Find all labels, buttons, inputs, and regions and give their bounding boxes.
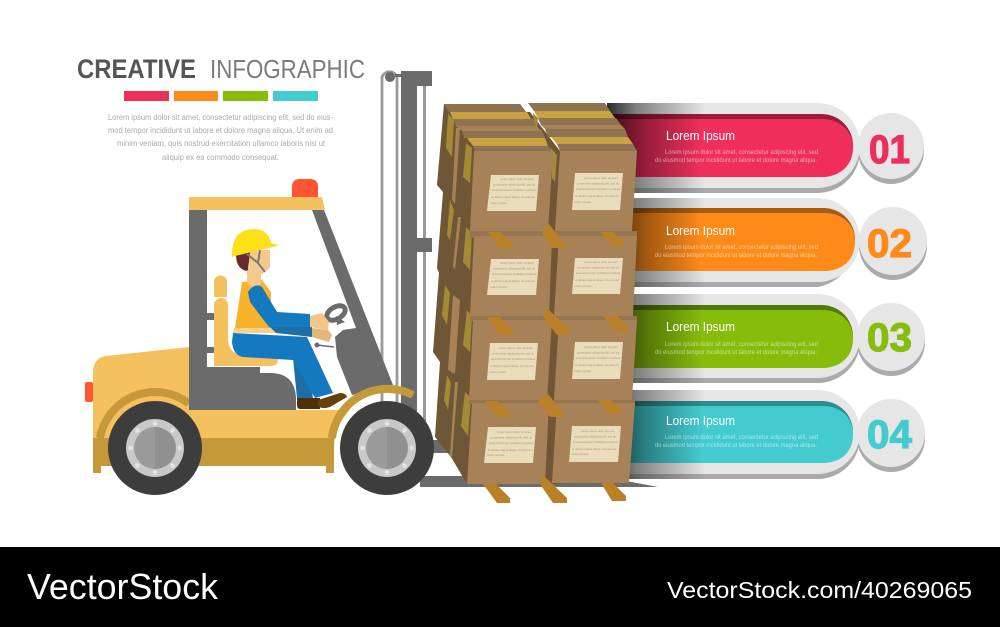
side tapes and edges: [442, 113, 557, 457]
panel: item 04: [607, 390, 925, 479]
box left row 4: consectetur adipiscing elit, sed do: [490, 436, 532, 440]
seat: [214, 276, 278, 366]
panel: item 01: 01: [869, 128, 910, 172]
box right row 2: [554, 231, 637, 316]
helmet: [232, 229, 278, 257]
rear light: [85, 382, 93, 402]
box left row 3: eiusmod tempor incididunt ut labore: [491, 357, 536, 361]
cab bars: [207, 313, 215, 353]
panel: item 02: Lorem Ipsum: [666, 223, 735, 238]
panel: item 04: Lorem Ipsum: [666, 413, 735, 428]
panel: item 03: do eiusmod tempor incididunt ut labore et dolore magna aliqua.: [655, 349, 817, 356]
title: INFOGRAPHIC: [210, 54, 365, 84]
panel: item 04: 04: [867, 413, 913, 457]
box left row 3: Lorem ipsum dolor sit amet: [499, 346, 533, 350]
box right row 1: et dolore magna aliqua. Ut enim ad: [575, 194, 619, 198]
panel: item 03: Lorem Ipsum: [666, 319, 735, 334]
box left row 2: minim veniam.: [490, 285, 508, 289]
back stack side: [433, 104, 560, 484]
box left row 4: Lorem ipsum dolor sit amet: [497, 430, 531, 434]
box right row 4: minim veniam.: [571, 452, 589, 456]
box left row 4: eiusmod tempor incididunt ut labore: [489, 441, 534, 445]
panel: item 02: 02: [867, 222, 912, 266]
far forearm and hand: [269, 326, 332, 342]
front fender: [332, 389, 413, 438]
box left row 1: et dolore magna aliqua. Ut enim ad: [491, 195, 535, 199]
title: CREATIVE: [77, 54, 196, 84]
near arm: [248, 285, 310, 327]
intro paragraph: mod tempor incididunt ut labore et dolore magna aliqua. Ut enim ad: [108, 126, 333, 135]
box left row 4: minim veniam.: [487, 453, 505, 457]
box right row 4: et dolore magna aliqua. Ut enim ad: [572, 447, 616, 451]
panel: item 04: do eiusmod tempor incididunt ut labore et dolore magna aliqua.: [655, 442, 817, 449]
vest: [235, 280, 271, 328]
panel: item 03: Lorem ipsum dolor sit amet, consectetur adipiscing elit, sed: [665, 341, 818, 348]
body: [93, 347, 350, 448]
box left row 2: et dolore magna aliqua. Ut enim ad: [491, 279, 535, 283]
lever: [314, 342, 334, 348]
fork: [420, 476, 658, 487]
panel: item 01: Lorem ipsum dolor sit amet, consectetur adipiscing elit, sed: [665, 149, 818, 156]
panel: item 03: [607, 294, 925, 383]
intro paragraph: Lorem ipsum dolor sit amet, consectetur adipiscing elit, sed do eius-: [108, 113, 333, 122]
box left row 3: [469, 316, 552, 400]
box left row 3: et dolore magna aliqua. Ut enim ad: [490, 364, 534, 368]
forklift: [85, 179, 434, 495]
watermark bar: VectorStock: [27, 566, 219, 607]
hair: [236, 252, 250, 271]
box right row 3: eiusmod tempor incididunt ut labore: [576, 356, 621, 360]
trousers: [232, 333, 333, 398]
box right row 4: eiusmod tempor incididunt ut labore: [573, 440, 618, 444]
box right row 2: Lorem ipsum dolor sit amet: [584, 260, 618, 264]
beacon: [292, 179, 318, 197]
helmet strap: [247, 250, 265, 272]
box right row 3: Lorem ipsum dolor sit amet: [584, 345, 618, 349]
box left row 2: [470, 231, 552, 316]
box left row 4: [467, 400, 549, 484]
front wheel: [340, 401, 434, 495]
colour bars: [124, 91, 318, 101]
box right row 1: Lorem ipsum dolor sit amet: [584, 176, 618, 180]
panel: item 02: [607, 198, 927, 287]
box right row 2: consectetur adipiscing elit, sed do: [577, 266, 619, 270]
intro paragraph: [108, 113, 333, 162]
intro paragraph: minim veniam, quis nostrud exercitation ullamco laboris nisi ut: [117, 139, 326, 148]
panel: item 01: Lorem Ipsum: [666, 128, 735, 143]
title: [77, 54, 365, 84]
watermark bar: VectorStock.com/40269065: [667, 577, 972, 603]
seat base and cab frame: [189, 210, 296, 410]
watermark bar: [0, 547, 1000, 627]
panel: item 02: do eiusmod tempor incididunt ut labore et dolore magna aliqua.: [655, 252, 817, 259]
stacked boxes: [433, 103, 637, 503]
box right row 2: et dolore magna aliqua. Ut enim ad: [575, 278, 619, 282]
box left row 2: Lorem ipsum dolor sit amet: [500, 261, 534, 265]
box left row 2: consectetur adipiscing elit, sed do: [493, 266, 535, 270]
lower body band: [93, 438, 334, 473]
panel: item 01: do eiusmod tempor incididunt ut labore et dolore magna aliqua.: [655, 157, 817, 164]
box right row 4: [552, 400, 635, 483]
box tops right: [528, 103, 637, 151]
box right row 1: [555, 151, 637, 231]
box right row 3: et dolore magna aliqua. Ut enim ad: [575, 363, 619, 367]
box left row 1: consectetur adipiscing elit, sed do: [493, 182, 535, 186]
box left row 3: minim veniam.: [489, 370, 507, 374]
box right row 3: consectetur adipiscing elit, sed do: [577, 350, 619, 354]
near hand: [310, 313, 329, 330]
front pillar and dashboard: [312, 210, 393, 395]
box left row 1: [470, 151, 553, 231]
belt: [233, 328, 281, 333]
rear wheel: [108, 401, 202, 495]
box left row 4: et dolore magna aliqua. Ut enim ad: [488, 448, 532, 452]
box right row 2: minim veniam.: [574, 284, 592, 288]
box right row 4: consectetur adipiscing elit, sed do: [574, 434, 616, 438]
box right row 1: consectetur adipiscing elit, sed do: [577, 182, 619, 186]
box left row 1: eiusmod tempor incididunt ut labore: [492, 188, 537, 192]
neck and face: [247, 250, 270, 288]
roof: [189, 197, 325, 210]
shoes: [297, 393, 347, 409]
box right row 4: Lorem ipsum dolor sit amet: [581, 429, 615, 433]
panel: item 01: [607, 103, 924, 193]
box left row 1: Lorem ipsum dolor sit amet: [500, 177, 534, 181]
box left row 2: eiusmod tempor incididunt ut labore: [492, 272, 537, 276]
panel: item 04: Lorem ipsum dolor sit amet, consectetur adipiscing elit, sed: [665, 434, 818, 441]
back leg: [293, 358, 313, 398]
box left row 1: minim veniam.: [490, 201, 508, 205]
box right row 1: minim veniam.: [574, 200, 592, 204]
rear fender: [100, 392, 189, 438]
forklift mast: [382, 71, 457, 453]
intro paragraph: aliquip ex ea commodo consequat.: [162, 153, 279, 162]
steering wheel: [324, 303, 348, 325]
pallet planks: [483, 223, 629, 503]
panel: item 02: Lorem ipsum dolor sit amet, consectetur adipiscing elit, sed: [665, 244, 818, 251]
box right row 1: eiusmod tempor incididunt ut labore: [576, 187, 621, 191]
box right row 3: [554, 316, 637, 400]
box right row 3: minim veniam.: [574, 369, 592, 373]
box left row 3: consectetur adipiscing elit, sed do: [492, 352, 534, 356]
panel: item 03: 03: [867, 316, 912, 360]
box right row 2: eiusmod tempor incididunt ut labore: [576, 271, 621, 275]
box tops left: [444, 104, 553, 151]
